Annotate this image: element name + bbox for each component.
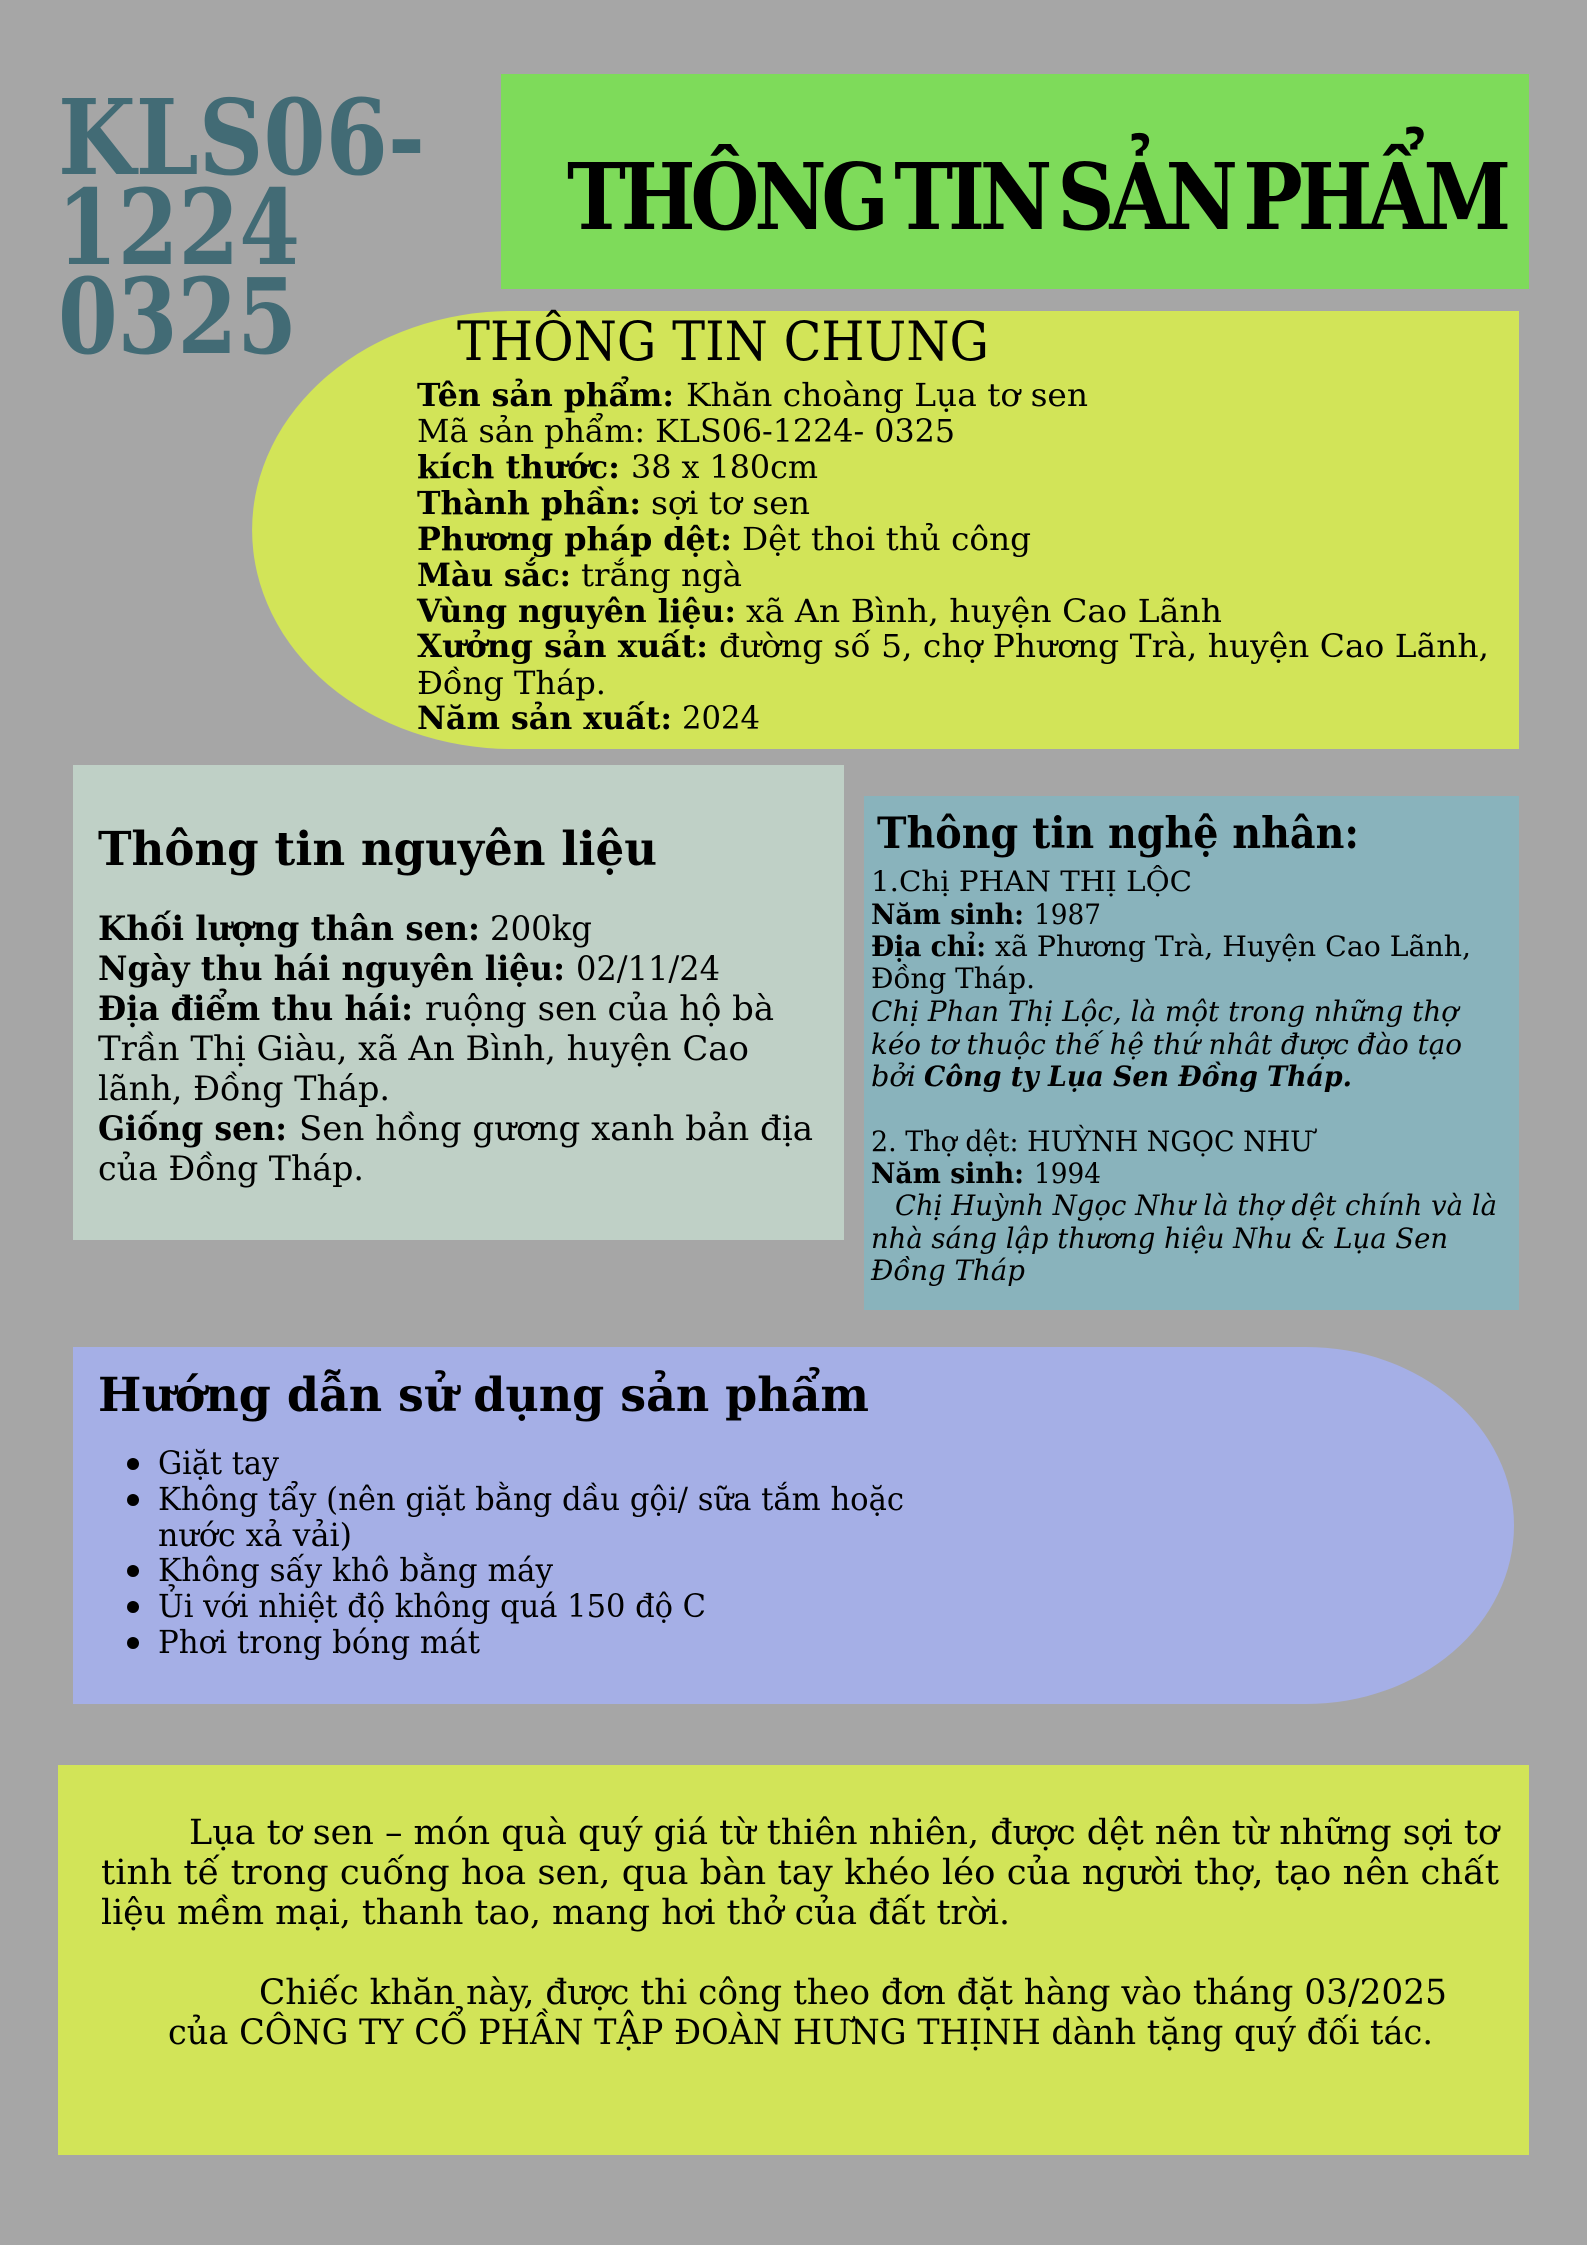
material information text xyxy=(98,909,813,1189)
artisan 1: kéo tơ thuộc thế hệ thứ nhât được đào tạo xyxy=(871,1028,1462,1061)
product code heading: 0325 xyxy=(58,255,297,378)
usage list: Giặt tay xyxy=(158,1444,279,1482)
heading: usage instructions: Hướng dẫn sử dụng sản phẩm xyxy=(98,1367,869,1423)
panel: closing message xyxy=(58,1765,1529,2155)
closing paragraph 2 xyxy=(168,1973,1447,2053)
closing paragraph 2: của CÔNG TY CỔ PHẦN TẬP ĐOÀN HƯNG THỊNH dành tặng quý đối tác. xyxy=(168,2005,1433,2053)
closing paragraph 2: Chiếc khăn này, được thi công theo đơn đặt hàng vào tháng 03/2025 xyxy=(259,1973,1447,2013)
product code heading: KLS06- xyxy=(58,76,425,199)
artisan 2 xyxy=(870,1125,1497,1287)
general information text: đường số 5, chợ Phương Trà, huyện Cao Lãnh, xyxy=(719,627,1489,665)
artisan 2: 2. Thợ dệt: HUỲNH NGỌC NHƯ xyxy=(871,1125,1317,1158)
artisan 1: Địa chỉ: xyxy=(871,930,986,963)
general information text: kích thước: xyxy=(417,448,620,486)
general information text: 38 x 180cm xyxy=(631,448,818,486)
general information text: Đồng Tháp. xyxy=(417,664,606,702)
material information text: Ngày thu hái nguyên liệu: xyxy=(98,949,565,989)
usage list: nước xả vải) xyxy=(158,1516,352,1554)
panel: material information xyxy=(73,765,844,1240)
closing paragraph 1: Lụa tơ sen – món quà quý giá từ thiên nhiên, được dệt nên từ những sợi tơ xyxy=(189,1813,1501,1853)
material information text: của Đồng Tháp. xyxy=(98,1149,364,1189)
usage list: Ủi với nhiệt độ không quá 150 độ C xyxy=(158,1584,706,1625)
general information text: sợi tơ sen xyxy=(651,484,810,522)
artisan 1: Chị Phan Thị Lộc, là một trong những thợ xyxy=(871,995,1461,1028)
general information text: trắng ngà xyxy=(581,556,742,594)
artisan 1: xã Phương Trà, Huyện Cao Lãnh, xyxy=(995,930,1471,963)
title banner xyxy=(501,74,1529,289)
panel: artisan information xyxy=(864,796,1519,1310)
panel: general information xyxy=(252,309,1519,749)
material information text: Giống sen: xyxy=(98,1109,287,1149)
general information text: Tên sản phẩm: xyxy=(417,375,674,414)
material information text: lãnh, Đồng Tháp. xyxy=(98,1069,390,1109)
heading: artisan information: Thông tin nghệ nhân: xyxy=(877,809,1359,859)
usage list: Không tẩy (nên giặt bằng dầu gội/ sữa tắm hoặc xyxy=(158,1480,904,1518)
general information text xyxy=(416,375,1489,737)
artisan 1: Đồng Tháp. xyxy=(871,962,1035,995)
general information text: Dệt thoi thủ công xyxy=(742,520,1031,558)
general information text: Năm sản xuất: xyxy=(417,699,672,737)
general information text: 2024 xyxy=(682,699,760,737)
material information text: Khối lượng thân sen: xyxy=(98,909,480,949)
heading: general information: THÔNG TIN CHUNG xyxy=(457,309,989,373)
panel: usage instructions xyxy=(73,1347,1514,1704)
artisan 2: Năm sinh: xyxy=(871,1157,1024,1190)
artisan 2: Chị Huỳnh Ngọc Như là thợ dệt chính và là xyxy=(895,1189,1497,1222)
artisan 1: Năm sinh: xyxy=(871,898,1024,931)
usage list xyxy=(127,1444,904,1661)
general information text: Mã sản phẩm: KLS06-1224- 0325 xyxy=(417,412,955,450)
product code heading: 1224 xyxy=(57,166,300,289)
general information text: Xưởng sản xuất: xyxy=(417,627,708,665)
general information text: Màu sắc: xyxy=(417,556,571,594)
general information text: Khăn choàng Lụa tơ sen xyxy=(686,376,1088,414)
artisan 1 xyxy=(871,865,1471,1093)
general information text: Vùng nguyên liệu: xyxy=(416,592,736,630)
artisan 2: nhà sáng lập thương hiệu Nhu & Lụa Sen xyxy=(871,1222,1448,1255)
closing paragraph 1 xyxy=(101,1813,1501,1933)
closing paragraph 1: tinh tế trong cuống hoa sen, qua bàn tay khéo léo của người thợ, tạo nên chất xyxy=(101,1853,1499,1893)
usage list: Phơi trong bóng mát xyxy=(158,1623,480,1661)
closing paragraph 1: liệu mềm mại, thanh tao, mang hơi thở của đất trời. xyxy=(101,1893,1010,1933)
product code heading xyxy=(57,76,425,378)
material information text: Địa điểm thu hái: xyxy=(98,988,413,1029)
general information text: xã An Bình, huyện Cao Lãnh xyxy=(746,592,1222,630)
artisan 2: Đồng Tháp xyxy=(870,1254,1025,1287)
artisan 1: 1987 xyxy=(1034,898,1101,931)
material information text: Trần Thị Giàu, xã An Bình, huyện Cao xyxy=(98,1029,749,1069)
artisan 1: bởi xyxy=(871,1060,916,1093)
material information text: 02/11/24 xyxy=(576,949,720,989)
material information text: ruộng sen của hộ bà xyxy=(425,989,774,1029)
usage list: Không sấy khô bằng máy xyxy=(158,1551,553,1589)
heading: material information: Thông tin nguyên liệu xyxy=(98,822,657,877)
general information text: Thành phần: xyxy=(417,484,641,522)
material information text: Sen hồng gương xanh bản địa xyxy=(299,1109,813,1149)
artisan 1: 1.Chị PHAN THỊ LỘC xyxy=(871,865,1192,898)
artisan 1: Công ty Lụa Sen Đồng Tháp. xyxy=(924,1060,1352,1093)
material information text: 200kg xyxy=(490,909,592,949)
artisan 2: 1994 xyxy=(1034,1157,1101,1190)
general information text: Phương pháp dệt: xyxy=(417,520,732,558)
